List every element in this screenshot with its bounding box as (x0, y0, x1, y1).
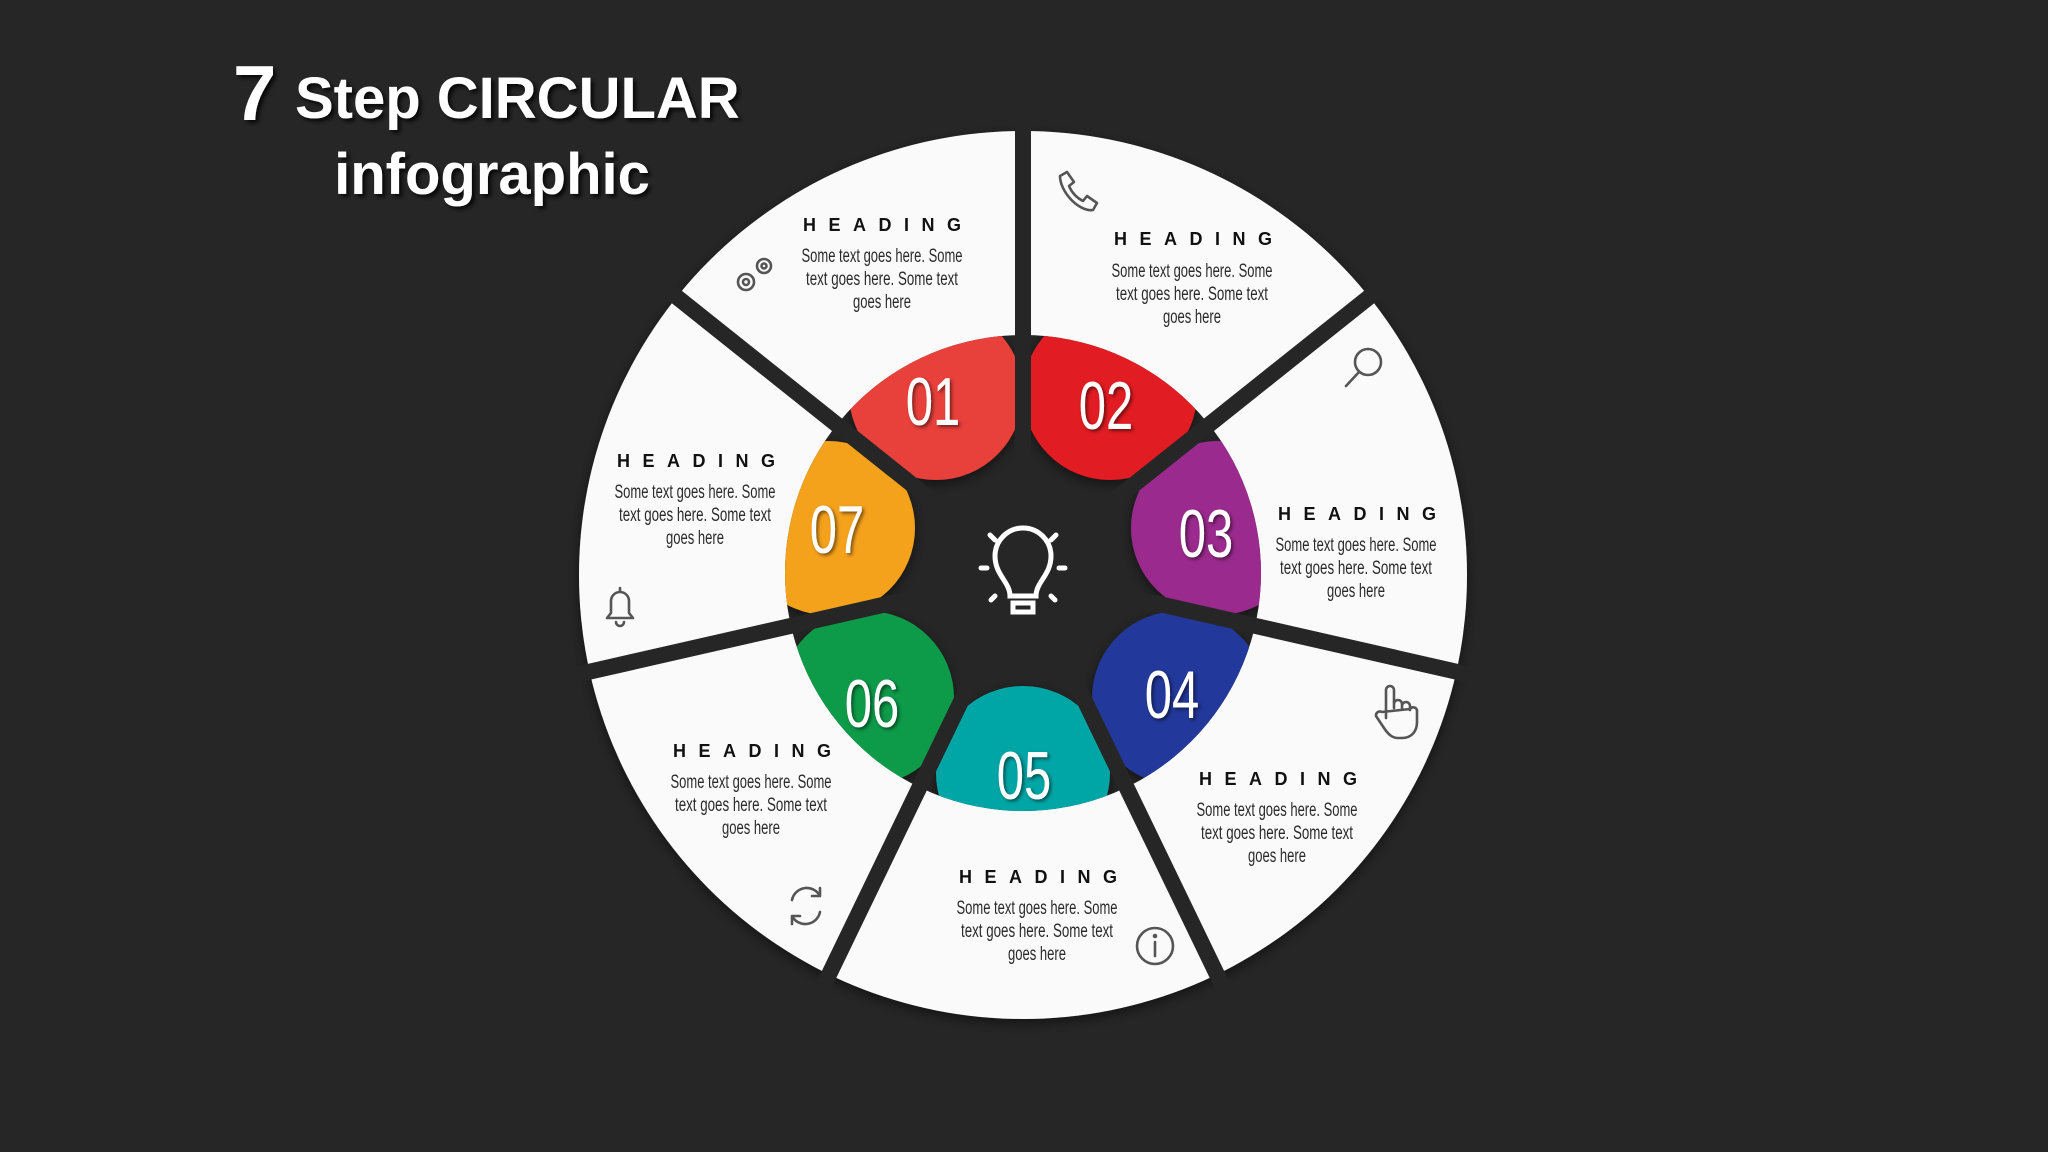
icon: phone (1060, 172, 1097, 210)
text block 01 (802, 215, 962, 313)
text block 03: text goes here. Some text (1280, 558, 1432, 579)
text block 01: Some text goes here. Some (802, 246, 962, 267)
text block 04: goes here (1248, 846, 1306, 867)
step numbers: 07 (810, 491, 864, 568)
step numbers: 02 (1079, 367, 1133, 444)
text block 02: goes here (1163, 307, 1221, 328)
text block 05: goes here (1008, 944, 1066, 965)
text block 06 (670, 741, 832, 839)
title (233, 49, 740, 207)
text block 02 (1112, 229, 1272, 328)
text block 04 (1196, 769, 1358, 867)
text block 03: goes here (1327, 581, 1385, 602)
step numbers: 06 (845, 665, 899, 742)
icon: hand pointer (1376, 686, 1417, 738)
circular wheel (575, 113, 1471, 1019)
text block 07: text goes here. Some text (619, 505, 771, 526)
text block 04: HEADING (1199, 769, 1357, 789)
icon: bell (607, 588, 633, 626)
text block 06: HEADING (673, 741, 831, 761)
text block 05: HEADING (959, 867, 1117, 887)
colored number blobs (785, 336, 1261, 811)
text block 04: Some text goes here. Some (1196, 800, 1358, 821)
step numbers: 05 (997, 737, 1051, 814)
text block 05: text goes here. Some text (961, 921, 1113, 942)
text block 01: text goes here. Some text (806, 269, 958, 290)
text block 07 (614, 451, 776, 549)
text block 05 (956, 867, 1118, 965)
text block 07: goes here (666, 528, 724, 549)
icon: gears (738, 259, 771, 290)
step numbers (810, 363, 1233, 814)
text block 02: HEADING (1114, 229, 1272, 249)
icon: light bulb (981, 528, 1065, 612)
step numbers: 04 (1145, 656, 1199, 733)
text block 07: Some text goes here. Some (614, 482, 776, 503)
icon: magnifier (1346, 349, 1381, 386)
text block 02: text goes here. Some text (1116, 284, 1268, 305)
step numbers: 03 (1179, 495, 1233, 572)
text block 02: Some text goes here. Some (1112, 261, 1272, 282)
text block 04: text goes here. Some text (1201, 823, 1353, 844)
inner dark circle (785, 335, 1261, 811)
text block 07: HEADING (617, 451, 775, 471)
icon: refresh (792, 888, 820, 924)
text block 01: HEADING (803, 215, 961, 235)
text block 06: goes here (722, 818, 780, 839)
gap lines (575, 113, 1471, 987)
text block 03 (1276, 504, 1436, 602)
text block 05: Some text goes here. Some (956, 898, 1118, 919)
text block 03: Some text goes here. Some (1276, 535, 1436, 556)
title: Step CIRCULAR (295, 66, 740, 131)
outer white ring (579, 131, 1467, 1019)
text block 06: Some text goes here. Some (670, 772, 832, 793)
step numbers: 01 (906, 363, 960, 440)
text block 01: goes here (853, 292, 911, 313)
text block 03: HEADING (1278, 504, 1436, 524)
icon: info (1137, 928, 1173, 964)
title: infographic (334, 142, 650, 207)
title: 7 (233, 49, 276, 137)
text block 06: text goes here. Some text (675, 795, 827, 816)
